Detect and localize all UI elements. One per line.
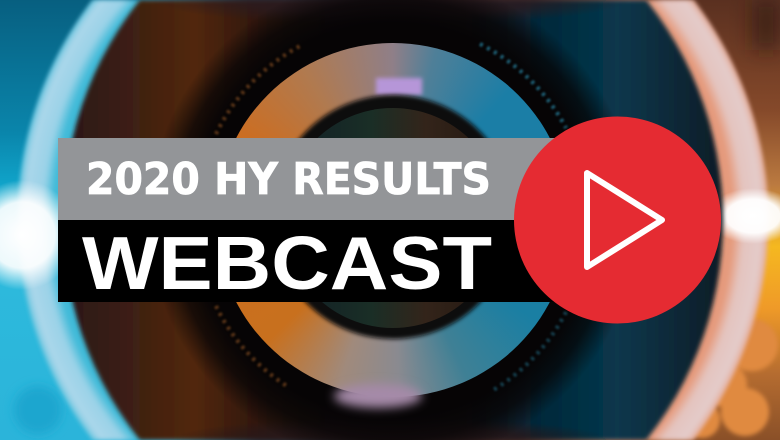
orange bokeh lights (684, 319, 778, 438)
icon: play button (514, 116, 721, 324)
inner glass (283, 108, 503, 328)
right orange glow (390, 0, 780, 440)
heading: WEBCAST: WEBCAST (82, 221, 492, 305)
black banner (58, 220, 558, 302)
top right corner shade (752, 0, 780, 50)
purple flare bottom (334, 384, 422, 408)
glinting rim top left (216, 46, 300, 134)
inner black ring (271, 95, 515, 339)
glinting rim top right (480, 44, 566, 128)
coloured lens disc (216, 43, 570, 397)
grey banner (58, 138, 558, 220)
glinting rim bottom left (216, 306, 290, 388)
blue bokeh light (14, 386, 62, 434)
white flare left (0, 180, 110, 290)
top barrel shade (150, 0, 630, 50)
white flare right (690, 188, 780, 244)
heading: 2020 HY RESULTS: 2020 HY RESULTS (86, 154, 491, 205)
bottom barrel shade (170, 395, 610, 440)
left blue glow (0, 0, 390, 440)
purple flare top (376, 78, 422, 95)
glinting rim bottom right (490, 312, 566, 392)
